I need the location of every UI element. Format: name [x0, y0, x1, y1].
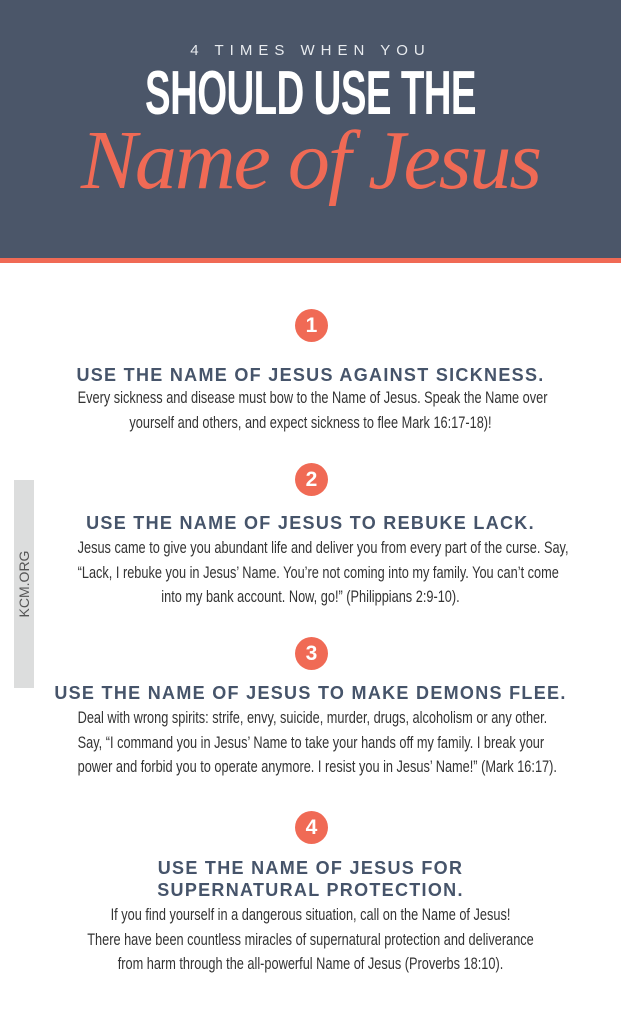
body 3 [78, 708, 557, 776]
title line 2: Name of Jesus [81, 114, 540, 207]
item 1 [76, 309, 548, 432]
number 4: 4 [306, 816, 317, 839]
sidebar: KCM.ORG [14, 480, 34, 688]
header panel [0, 0, 621, 258]
heading 2: USE THE NAME OF JESUS TO REBUKE LACK. [86, 513, 535, 533]
item 4 [87, 811, 534, 973]
number 1: 1 [306, 314, 317, 337]
heading 4 [157, 858, 464, 900]
heading 4: USE THE NAME OF JESUS FOR [158, 858, 463, 878]
body 2 [78, 538, 569, 606]
body 3: Say, “I command you in Jesus’ Name to take your hands off my family. I break your [78, 732, 544, 752]
body 1: yourself and others, and expect sickness to flee Mark 16:17-18)! [129, 412, 492, 432]
item 3 [54, 637, 567, 776]
body 3: Deal with wrong spirits: strife, envy, suicide, murder, drugs, alcoholism or any other. [78, 708, 547, 727]
body 2: into my bank account. Now, go!” (Philippians 2:9-10). [161, 587, 460, 606]
body 4: If you find yourself in a dangerous situation, call on the Name of Jesus! [111, 905, 510, 924]
body 4: There have been countless miracles of supernatural protection and deliverance [87, 930, 534, 948]
body 4 [87, 905, 534, 973]
body 1: Every sickness and disease must bow to the Name of Jesus. Speak the Name over [78, 388, 547, 407]
heading 4: SUPERNATURAL PROTECTION. [157, 880, 464, 900]
body 2: “Lack, I rebuke you in Jesus’ Name. You’re not coming into my family. You can’t come [78, 562, 559, 582]
number 3 [295, 637, 328, 670]
accent line [0, 258, 621, 263]
title line 1: SHOULD USE THE [145, 59, 476, 128]
number 2 [295, 463, 328, 496]
heading 3: USE THE NAME OF JESUS TO MAKE DEMONS FLEE. [54, 683, 567, 703]
sidebar: KCM.ORG: KCM.ORG [16, 551, 32, 617]
body 3: power and forbid you to operate anymore. I resist you in Jesus’ Name!” (Mark 16:17). [78, 757, 557, 776]
body 2: Jesus came to give you abundant life and deliver you from every part of the curse. Say, [78, 538, 569, 557]
heading 1: USE THE NAME OF JESUS AGAINST SICKNESS. [76, 365, 545, 385]
body 1 [78, 388, 548, 432]
body 4: from harm through the all-powerful Name of Jesus (Proverbs 18:10). [118, 954, 503, 973]
number 1 [295, 309, 328, 342]
item 2 [78, 463, 569, 606]
number 4 [295, 811, 328, 844]
number 3: 3 [306, 642, 317, 665]
subtitle: 4 TIMES WHEN YOU [190, 42, 431, 59]
number 2: 2 [306, 468, 317, 491]
